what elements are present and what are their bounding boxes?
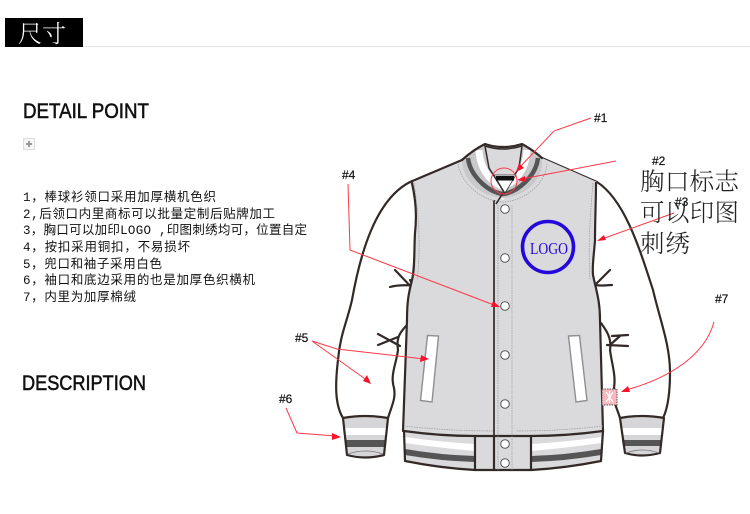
icon: plus box [24,138,34,150]
collar [458,144,547,204]
annotation: chest logo note: 可以印图 [640,199,739,227]
callout 4 [342,168,500,307]
callout 1 [516,111,608,172]
text block: detail list: 3，胸口可以加印LOGO ,印图刺绣均可，位置自定 [23,222,307,238]
callout 6 [279,392,341,440]
title: black tab: 尺寸 [18,21,66,48]
right sleeve [542,158,670,418]
left cuff [343,416,388,458]
hem band [404,431,603,470]
heading: description: DESCRIPTION [22,372,146,395]
callout 4: #4 [342,168,356,182]
title: black tab [5,18,83,48]
sleeve tag [602,389,617,405]
placket with buttons [494,200,512,470]
jacket illustration [336,144,670,470]
annotation: chest logo note: 刺绣 [640,230,690,258]
callout 5 [295,331,429,384]
right pocket [568,336,587,402]
jacket body [403,158,603,436]
callout 1: #1 [594,111,608,125]
callout 7: #7 [715,292,729,306]
annotation: chest logo note [640,168,740,258]
heading: detail point: DETAIL POINT [23,100,149,123]
left sleeve [336,182,421,418]
annotation: chest logo note: 胸口标志 [640,168,740,196]
header divider [5,46,750,47]
text block: detail list: 6，袖口和底边采用的也是加厚色织横机 [23,272,255,288]
text block: detail list: 2,后领口内里商标可以批量定制后贴牌加工 [23,206,275,222]
callout 3 [597,195,689,241]
chest logo: LOGO [530,239,568,258]
chest logo [522,222,574,272]
text block: detail list: 1，棒球衫领口采用加厚横机色织 [23,189,216,205]
callout 2: #2 [652,154,666,168]
text block: detail list: 5，兜口和袖子采用白色 [23,256,162,272]
callout 7 [621,292,729,392]
text block: detail list [23,189,307,305]
callout 2 [491,154,666,194]
text block: detail list: 4，按扣采用铜扣，不易损坏 [23,239,190,255]
callout 5: #5 [295,331,309,345]
text block: detail list: 7，内里为加厚棉绒 [23,290,136,305]
left pocket [420,336,438,402]
callout 3: #3 [675,195,689,209]
callout 6: #6 [279,392,293,406]
right cuff [620,416,664,456]
